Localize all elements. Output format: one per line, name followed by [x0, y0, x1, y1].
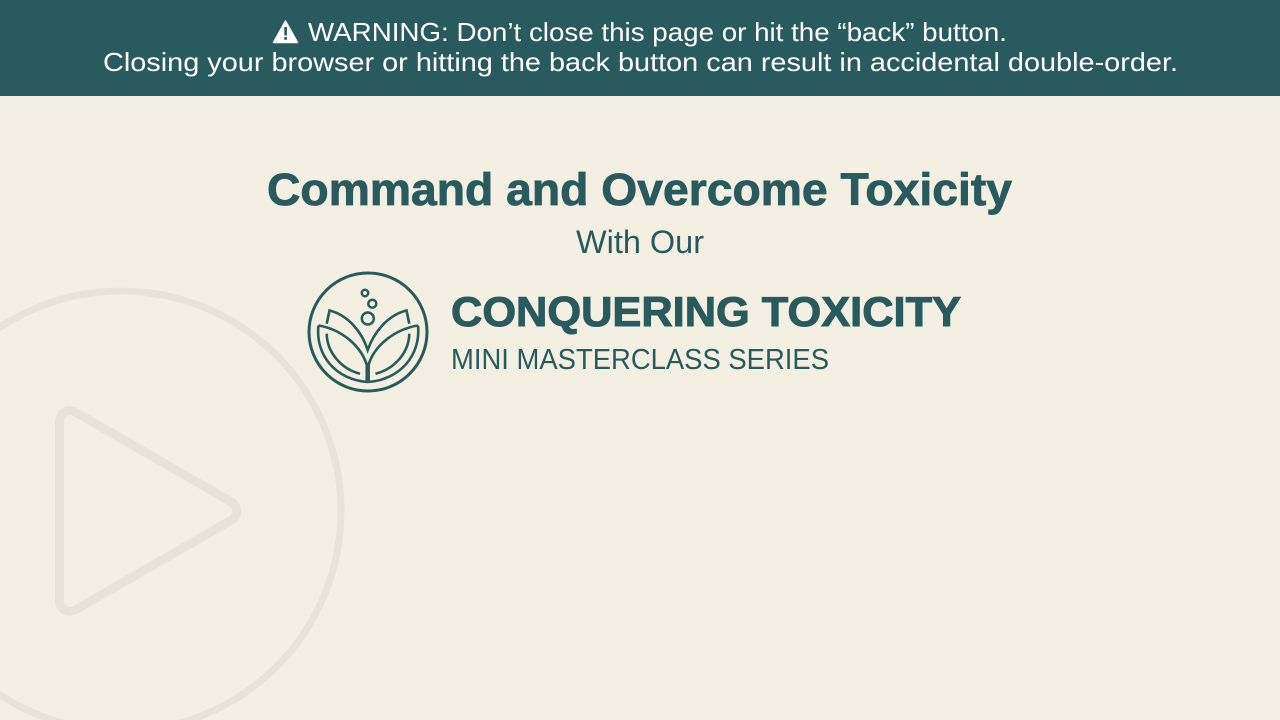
background play icon [0, 291, 341, 720]
warning line 2: Closing your browser or hitting the back button can result in accidental double-order. [103, 47, 1178, 77]
series tagline: MINI MASTERCLASS SERIES [451, 344, 829, 376]
subheading: With Our [576, 224, 704, 260]
warning banner [0, 0, 1280, 96]
icon: warning triangle [274, 21, 298, 42]
heading: Command and Overcome Toxicity [267, 164, 1012, 215]
warning line 1: WARNING: Don’t close this page or hit the “back” button. [308, 17, 1007, 47]
logo icon: lotus with bubbles [309, 273, 427, 391]
series name: CONQUERING TOXICITY [451, 288, 961, 335]
